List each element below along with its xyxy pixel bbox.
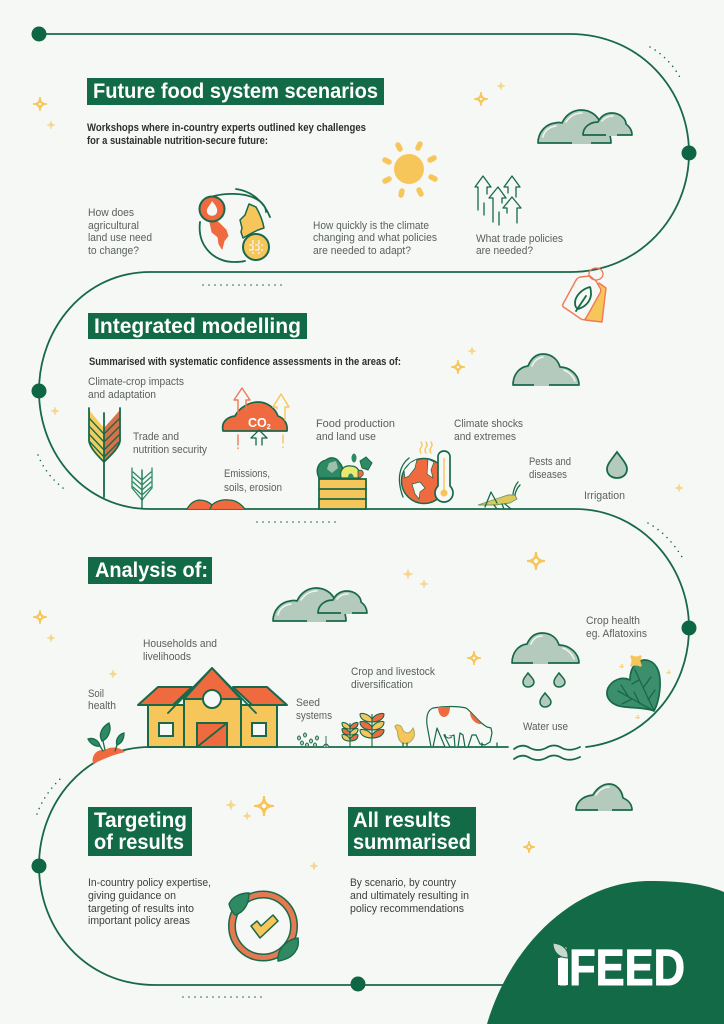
text: in-country expertise: [88, 877, 211, 927]
icon: CO2 cloud: [223, 388, 289, 448]
label: crop and livestock: Crop and livestock: [351, 666, 435, 678]
label: trade and nutrition: [133, 431, 207, 456]
question: agricultural land use: How does: [88, 207, 134, 219]
logo panel: green corner: [487, 881, 724, 1024]
decorative sparkle stars: [33, 82, 683, 870]
question: agricultural land use: [88, 207, 152, 257]
label: climate-crop impacts: [88, 376, 184, 401]
question: trade policies: What trade policies: [476, 233, 563, 245]
icon: globe and thermometer: [399, 442, 453, 504]
label: climate shocks: and extremes: [454, 431, 516, 443]
icon: clouds analysis: [273, 588, 367, 621]
icon: crop health leaf: [607, 656, 672, 720]
label: climate shocks: [454, 418, 523, 443]
label: seed systems: [296, 697, 332, 722]
label: climate shocks: Climate shocks: [454, 418, 523, 430]
heading: Future food system scenarios: Future food system scenarios: [93, 80, 378, 103]
logo: iFEED: iFEED: [557, 939, 685, 996]
question: climate change: [313, 220, 437, 257]
label: water use: Water use: [523, 721, 568, 733]
icon: CO2 cloud: 2: [267, 424, 271, 431]
icon: seeds: [298, 733, 329, 747]
icon: grasshopper: [478, 482, 520, 509]
icon: clouds top: [538, 110, 632, 143]
heading: Targeting of results: Targeting: [94, 809, 187, 832]
label: climate-crop impacts: Climate-crop impacts: [88, 376, 184, 388]
label: crop health: Crop health: [586, 615, 640, 627]
icon: cycle with check: [229, 893, 298, 961]
label: crop health: [586, 615, 647, 640]
label: pests and diseases: [529, 456, 571, 481]
label: pests and diseases: diseases: [529, 469, 567, 481]
icon: water drop irrigation: [607, 452, 627, 478]
label: soil health: health: [88, 700, 116, 712]
icon: soil plant: [88, 723, 125, 764]
heading: Analysis of: Analysis of:: [95, 559, 208, 582]
label: crop and livestock: [351, 666, 435, 691]
label: crop and livestock: diversification: [351, 679, 413, 691]
label: irrigation: Irrigation: [584, 490, 625, 502]
intro text: workshops: for a sustainable nutrition-secure future:: [87, 135, 268, 147]
label: climate-crop impacts: and adaptation: [88, 389, 156, 401]
label: food production: and land use: [316, 431, 376, 443]
heading: All results summarised: All results: [353, 809, 451, 832]
text: by scenario: [350, 877, 469, 915]
icon: price tag: [563, 268, 606, 322]
text: in-country expertise: important policy areas: [88, 915, 190, 927]
icon: soil mounds: [187, 500, 245, 509]
label: soil health: [88, 688, 116, 712]
icon: crops: [342, 714, 384, 747]
question: climate change: changing and what policies: [313, 232, 437, 244]
label: households: [143, 638, 217, 663]
text: in-country expertise: targeting of results into: [88, 903, 194, 915]
text: by scenario: By scenario, by country: [350, 877, 456, 889]
icon: vegetable crate: [317, 454, 372, 509]
question: climate change: are needed to adapt?: [313, 245, 411, 257]
question: agricultural land use: agricultural: [88, 220, 139, 232]
label: trade and nutrition: nutrition security: [133, 444, 207, 456]
question: trade policies: [476, 233, 563, 257]
heading: Integrated modelling: Integrated modelling: [94, 315, 301, 338]
label: households: Households and: [143, 638, 217, 650]
text: by scenario: policy recommendations: [350, 903, 464, 915]
label: soil health: Soil: [88, 688, 104, 700]
intro text: summarised: Summarised with systematic confidence assessments in the areas of:: [89, 356, 401, 368]
question: climate change: How quickly is the climate: [313, 220, 429, 232]
icon: cow: [427, 706, 497, 747]
label: seed systems: Seed: [296, 697, 320, 709]
text: in-country expertise: giving guidance on: [88, 890, 176, 902]
icon: water waves: [514, 746, 580, 760]
label: food production: Food production: [316, 418, 395, 430]
icon: chicken: [395, 725, 414, 747]
question: trade policies: are needed?: [476, 245, 533, 257]
icon: large wheat: [89, 408, 120, 497]
heading: Targeting of results: [88, 807, 192, 856]
label: emissions: soils, erosion: [224, 482, 282, 494]
icon: rain cloud and drops: [512, 633, 579, 707]
question: agricultural land use: to change?: [88, 245, 139, 257]
icon: small wheat: [132, 468, 152, 509]
icon: cloud modelling: [513, 354, 579, 385]
label: emissions: [224, 468, 282, 494]
intro text: workshops: Workshops where in-country experts outlined key challenges: [87, 122, 366, 134]
text: by scenario: and ultimately resulting in: [350, 890, 469, 902]
intro text: workshops: [87, 122, 366, 147]
heading: Targeting of results: of results: [94, 831, 184, 854]
text: in-country expertise: In-country policy expertise,: [88, 877, 211, 889]
label: trade and nutrition: Trade and: [133, 431, 179, 443]
icon: CO2 cloud: CO: [248, 416, 267, 430]
heading: All results summarised: [348, 807, 476, 856]
icon: sun: [385, 144, 435, 195]
icon: farmhouse: [138, 668, 287, 747]
label: food production: [316, 418, 395, 443]
label: emissions: Emissions,: [224, 468, 270, 480]
question: agricultural land use: land use need: [88, 232, 152, 244]
label: crop health: eg. Aflatoxins: [586, 628, 647, 640]
heading: All results summarised: summarised: [353, 831, 471, 854]
icon: trade arrows: [475, 176, 521, 225]
icon: globe with fire and lime: [200, 189, 270, 262]
label: seed systems: systems: [296, 710, 332, 722]
icon: cloud bottom: [576, 784, 632, 810]
label: pests and diseases: Pests and: [529, 456, 571, 468]
label: households: livelihoods: [143, 651, 191, 663]
